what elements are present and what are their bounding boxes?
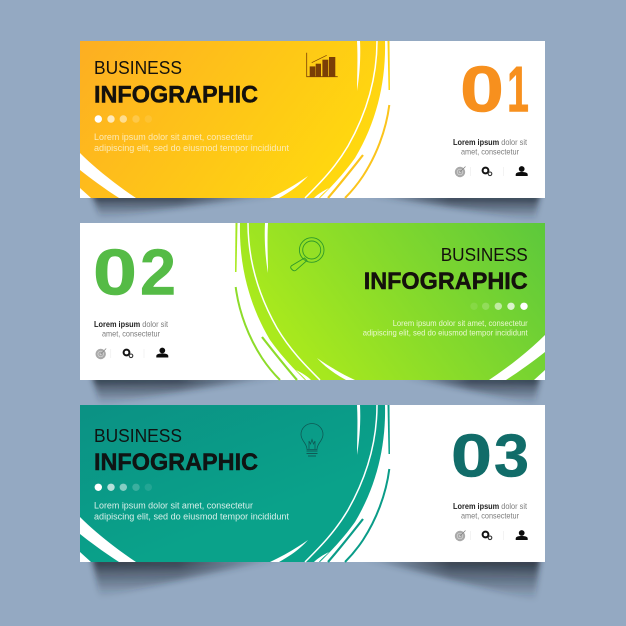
banner 2 card and green brush circle: [80, 223, 545, 380]
icon: bar chart: [307, 53, 338, 77]
banner 3 card and teal brush circle: [80, 405, 545, 562]
pagination dots: [470, 303, 528, 310]
icon row: [455, 166, 528, 177]
side caption: [453, 137, 528, 156]
number 01: 1: [507, 52, 529, 125]
number 01: 0: [460, 52, 504, 125]
heading: business infographic: INFOGRAPHIC: [364, 268, 528, 295]
body text: [94, 132, 289, 154]
number 02: 0: [93, 236, 137, 308]
heading: business infographic: [364, 245, 528, 295]
side caption: [453, 501, 528, 520]
body text: [94, 500, 289, 522]
body text: Lorem ipsum dolor sit amet, consectetur: [94, 500, 253, 512]
heading: business infographic: [94, 58, 258, 108]
heading: business infographic: BUSINESS: [94, 58, 182, 78]
pagination dots: [95, 115, 152, 123]
pagination dots: [95, 484, 152, 491]
body text: adipiscing elit, sed do eiusmod tempor incididunt: [94, 143, 289, 154]
body text: adipiscing elit, sed do eiusmod tempor incididunt: [363, 329, 528, 338]
side caption: amet, consectetur: [461, 146, 519, 156]
icon: light bulb: [301, 424, 323, 456]
heading: business infographic: BUSINESS: [441, 245, 528, 265]
panel: banner 3: [80, 405, 545, 562]
number 03: 3: [494, 422, 529, 490]
banner shadows: [92, 194, 540, 600]
heading: business infographic: INFOGRAPHIC: [94, 449, 258, 476]
body text: Lorem ipsum dolor sit amet, consectetur: [393, 319, 528, 328]
side caption: amet, consectetur: [102, 328, 160, 338]
heading: business infographic: INFOGRAPHIC: [94, 81, 258, 108]
side caption: Lorem ipsum dolor sit: [453, 137, 528, 147]
icon row: [96, 348, 168, 359]
number 02: 2: [140, 236, 176, 308]
side caption: [94, 319, 169, 338]
side caption: Lorem ipsum dolor sit: [453, 501, 528, 511]
body text: Lorem ipsum dolor sit amet, consectetur: [94, 132, 253, 143]
heading: business infographic: BUSINESS: [94, 426, 182, 446]
icon: magnifier: [291, 238, 324, 271]
icon row: [455, 530, 528, 541]
body text: adipiscing elit, sed do eiusmod tempor incididunt: [94, 512, 289, 522]
panel: banner 2: [80, 223, 545, 380]
heading: business infographic: [94, 426, 258, 476]
banner 1 card and yellow brush circle: [80, 41, 545, 198]
number 03: 0: [451, 422, 492, 490]
panel: banner 1: [80, 41, 545, 198]
side caption: Lorem ipsum dolor sit: [94, 319, 169, 329]
body text: [363, 319, 528, 338]
side caption: amet, consectetur: [461, 510, 519, 520]
